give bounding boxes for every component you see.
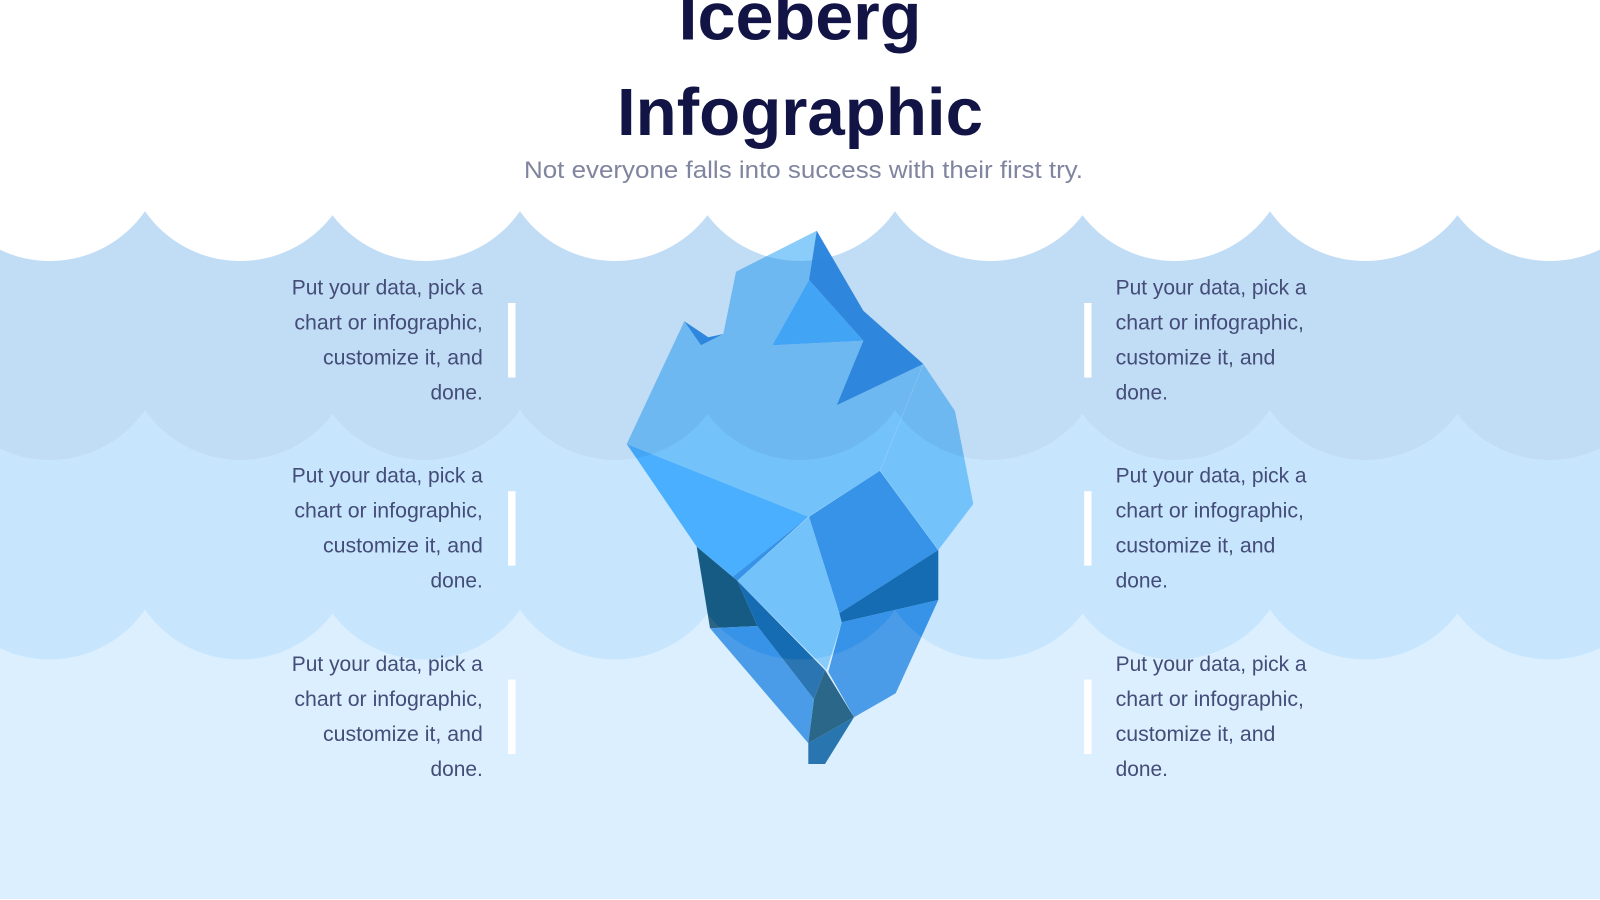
- left text block 3: done.: [430, 758, 483, 781]
- wave band top: [0, 211, 1600, 460]
- right text block 1: [1116, 276, 1307, 404]
- lower right facet: [828, 600, 938, 717]
- left text block 3: [292, 653, 483, 781]
- left text block 2: done.: [430, 570, 483, 592]
- right text block 1: customize it, and: [1116, 346, 1275, 369]
- right text block 2: Put your data, pick a: [1116, 464, 1307, 488]
- teal keel facet: [808, 670, 854, 743]
- left text block 2: [292, 464, 483, 592]
- bright left facet: [627, 444, 808, 577]
- right text block 3: [1116, 653, 1307, 781]
- left text block 3: Put your data, pick a: [292, 653, 483, 676]
- right text block 1: Put your data, pick a: [1116, 276, 1307, 299]
- right text block 3: chart or infographic,: [1116, 688, 1304, 711]
- left bar 3: [508, 680, 516, 754]
- central square facet: [809, 471, 938, 613]
- right text block 3: customize it, and: [1116, 723, 1275, 746]
- right text block 3: Put your data, pick a: [1116, 653, 1307, 676]
- left bar 1: [508, 303, 516, 378]
- wave band bottom: [0, 610, 1600, 899]
- left text block 1: customize it, and: [323, 346, 483, 369]
- right text block 2: chart or infographic,: [1116, 500, 1304, 522]
- dark peak facet: [809, 231, 923, 405]
- right light face: [880, 364, 973, 550]
- left text block 1: Put your data, pick a: [292, 276, 483, 299]
- central light facet: [737, 517, 842, 670]
- left text block 3: chart or infographic,: [294, 688, 483, 711]
- dark diagonal facet: [737, 581, 825, 699]
- left text block 1: done.: [430, 381, 483, 404]
- left text block 1: chart or infographic,: [294, 311, 483, 334]
- bottom tip facet: [808, 717, 854, 764]
- left text block 2: chart or infographic,: [294, 500, 483, 522]
- small notch facet: [684, 321, 723, 345]
- upper light face: [627, 231, 923, 517]
- right text block 2: done.: [1116, 570, 1168, 592]
- right text block 2: customize it, and: [1116, 534, 1275, 558]
- left text block 2: customize it, and: [323, 534, 483, 558]
- right text block 2: [1116, 464, 1307, 592]
- dark left facet: [697, 547, 757, 628]
- right text block 3: done.: [1116, 758, 1168, 781]
- lower left facet: [710, 626, 814, 743]
- dark right facet: [839, 550, 938, 622]
- facet seam: [880, 364, 938, 550]
- left bar 2: [508, 491, 516, 566]
- left text block 1: [292, 276, 483, 404]
- title: Infographic: [617, 75, 983, 150]
- iceberg: [627, 231, 973, 764]
- bright peak triangle: [772, 280, 863, 345]
- wave band middle: [0, 410, 1600, 660]
- title: [617, 0, 983, 150]
- thin sliver facet: [733, 517, 808, 581]
- right text block 1: done.: [1116, 381, 1168, 404]
- left text block 2: Put your data, pick a: [292, 464, 483, 488]
- subtitle: Not everyone falls into success with their first try.: [524, 157, 1083, 184]
- right bar 3: [1084, 680, 1092, 754]
- right bar 1: [1084, 303, 1092, 378]
- left text block 3: customize it, and: [323, 723, 483, 746]
- right text block 1: chart or infographic,: [1116, 311, 1304, 334]
- right bar 2: [1084, 491, 1092, 566]
